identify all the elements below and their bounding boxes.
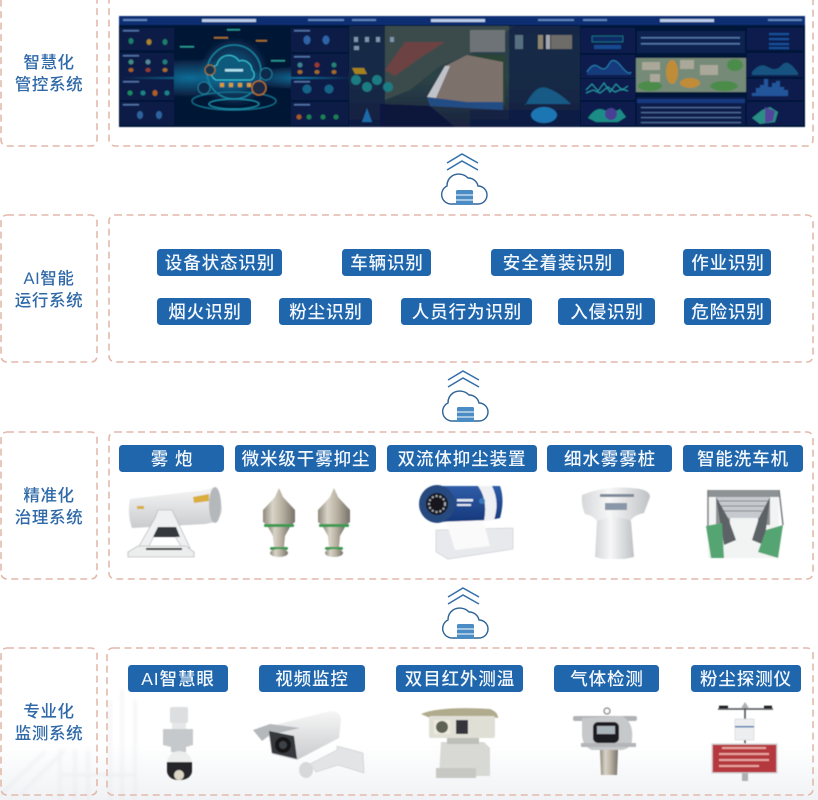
dashboard screen 1: side panels [120,28,348,125]
tag: fine mist pile [547,445,672,472]
panel: smart control label box [1,0,97,146]
dashboard header bar [119,16,805,25]
tag: binocular infrared thermometry [396,665,523,692]
tag: dry fog dust suppression: 微米级干雾抑尘 [242,449,370,469]
heading: professional monitoring system: 专业化 [23,702,75,721]
tag: dust detector [691,665,801,692]
background: faint industrial building [0,690,135,800]
heading: smart control system: 管控系统 [15,75,83,94]
tag: dual-fluid device: 双流体抑尘装置 [398,449,526,469]
panel: smart control content box [109,0,813,146]
device: bullet surveillance camera [253,711,364,778]
tag: fog cannon: 雾 炮 [151,449,193,469]
heading: precision treatment system: 治理系统 [15,508,83,527]
device: dry fog nozzles [263,488,350,557]
tag: equipment state: 设备状态识别 [165,253,275,273]
dashboard screen 3: heatmap and charts [580,26,805,127]
tag: gas detection: 气体检测 [570,669,644,689]
tag: fine mist pile: 细水雾雾桩 [564,449,656,469]
panel: precision treatment label box [1,432,97,579]
tag: equipment state [157,249,282,276]
device: AI smart eye camera [163,707,193,780]
panel: monitoring devices [107,648,813,795]
tag: safety clothing [491,249,624,276]
tag: binocular infrared thermometry: 双目红外测温 [405,669,515,689]
tag: intrusion: 入侵识别 [570,302,644,322]
tag: danger: 危险识别 [691,302,765,322]
tag: car washer: 智能洗车机 [697,449,789,469]
tag: personnel behaviour [401,298,532,325]
tag: video surveillance: 视频监控 [275,669,349,689]
panel: AI recognition box [109,215,813,362]
tag: work [683,249,771,276]
tag: video surveillance [259,665,365,692]
tag: car washer [683,445,803,472]
tag: vehicle: 车辆识别 [350,253,424,273]
tag: dust [279,298,372,325]
device: fine mist pile [582,487,650,559]
tag: vehicle [342,249,431,276]
tag: dust detector: 粉尘探测仪 [700,669,792,689]
heading: AI smart operation system [15,269,83,310]
heading: AI smart operation system: 运行系统 [15,291,83,310]
device: dust monitor with LED display [712,702,777,781]
tag: gas detection [554,665,659,692]
device: binocular thermal camera [421,708,498,778]
heading: precision treatment system [15,486,83,527]
panel: AI label box [1,215,97,362]
tag: dry fog dust suppression [235,445,376,472]
tag: AI smart eye [128,665,228,692]
tag: smoke and fire [157,298,251,325]
tag: intrusion [558,298,655,325]
heading: smart control system: 智慧化 [23,53,75,72]
device: intelligent car washer [706,490,783,558]
dashboard screen 1: AI cloud [115,26,360,127]
heading: professional monitoring system: 监测系统 [15,724,83,743]
tag: smoke and fire: 烟火识别 [168,302,242,322]
tag: personnel behaviour: 人员行为识别 [412,302,522,322]
device: fog cannon [128,487,222,557]
tag: dual-fluid device [387,445,537,472]
tag: AI smart eye: AI智慧眼 [141,669,215,689]
device: dual-fluid suppression unit [419,485,513,559]
tag: fog cannon [119,445,224,472]
device: gas detector [573,708,637,775]
connector: chevrons and cloud server 2 [443,371,488,422]
panel: precision treatment devices [109,432,813,579]
heading: professional monitoring system [15,702,83,743]
tag: danger [684,298,771,325]
heading: AI smart operation system: AI智能 [24,269,74,288]
connector: chevrons and cloud server 1 [442,154,487,205]
heading: smart control system [15,53,83,94]
tag: work: 作业识别 [691,253,765,273]
panel: professional monitoring label box [1,648,97,795]
heading: precision treatment system: 精准化 [23,486,75,505]
connector: chevrons and cloud server 3 [443,588,488,639]
dashboard screenshot [115,16,805,127]
tag: dust: 粉尘识别 [289,302,363,322]
dashboard screen 2: factory aerial view [349,26,580,127]
tag: safety clothing: 安全着装识别 [503,253,613,273]
